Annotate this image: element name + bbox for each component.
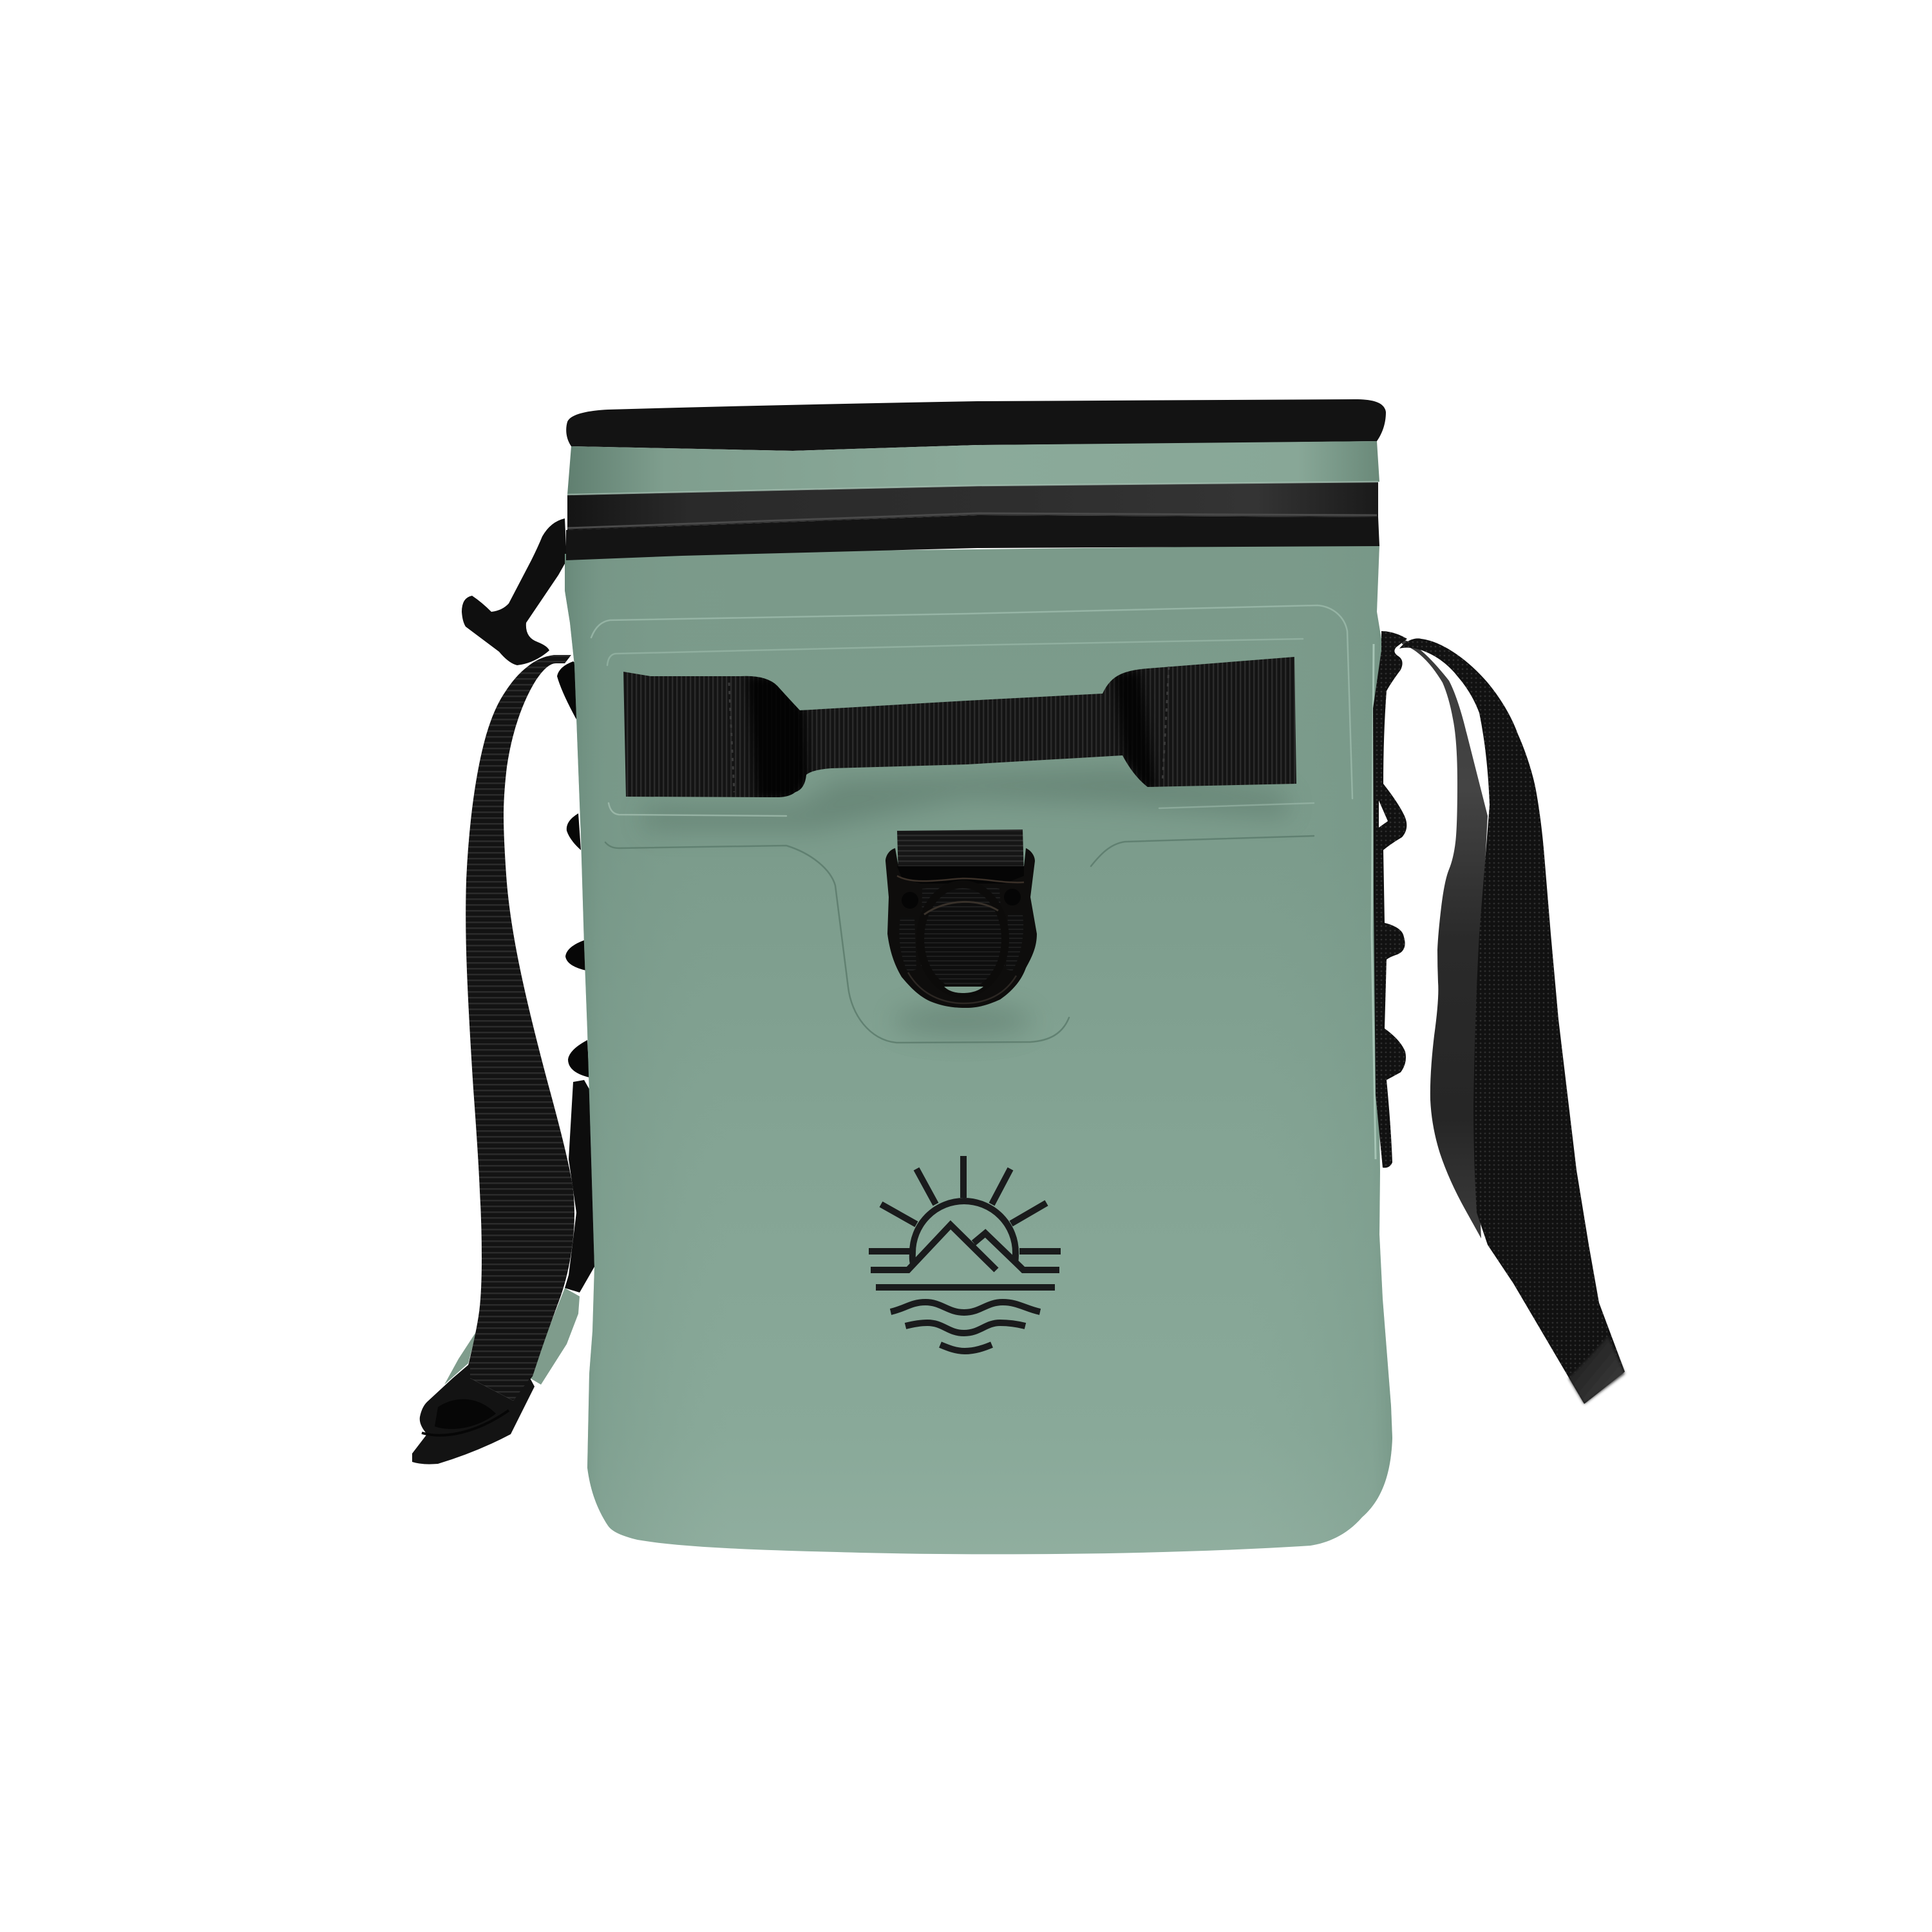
waves: [891, 1302, 1040, 1312]
left shoulder strap: [412, 655, 574, 1464]
sun rays: [881, 1156, 1046, 1224]
zipper lower lip: [566, 515, 1379, 560]
top black binding: [566, 399, 1386, 451]
mountains: [871, 1225, 1059, 1270]
side webbing: right: [1373, 631, 1407, 1168]
green lid stripe: [567, 441, 1379, 495]
zipper upper lip: [567, 482, 1378, 530]
left strap lower back piece: [565, 1080, 594, 1293]
handle fold shadows: [747, 670, 1156, 799]
strap front layer: [1399, 638, 1625, 1404]
strap back layer: [1402, 639, 1488, 1238]
welded seam panels: [591, 605, 1352, 1043]
sun arc: [913, 1201, 1016, 1264]
webbing through ring: [921, 886, 1005, 985]
right shoulder strap: [1399, 638, 1625, 1404]
side slots: [899, 918, 916, 972]
inner D highlight: [920, 884, 1005, 994]
sage opening: [944, 987, 983, 993]
left strap side loops: [557, 661, 589, 1077]
handle stitching: [729, 667, 1169, 792]
D-ring tie down: [886, 829, 1037, 1008]
zipper highlight: [567, 513, 1377, 528]
water line: [876, 1284, 1055, 1291]
bag body: [560, 541, 1397, 1558]
webbing tab: [897, 829, 1024, 876]
folded strap end: [412, 1363, 535, 1464]
ring plate: [886, 848, 1037, 1008]
ring holes: [902, 892, 918, 909]
handle webbing: [623, 657, 1296, 797]
product illustration: sage green cooler bag: [412, 399, 1627, 1555]
body edge shading: [560, 541, 1397, 1558]
logo: sun, mountains and waves: [869, 1156, 1061, 1351]
carry handle: [623, 657, 1296, 799]
waterproof zipper: [566, 482, 1379, 560]
left strap sage backing: [444, 1288, 580, 1385]
right side seam: [1372, 644, 1376, 1159]
gap under tab: [897, 866, 1024, 884]
horizon lines: [869, 1248, 1061, 1255]
clip hook: [462, 518, 567, 665]
frayed strap tip: [1569, 1336, 1625, 1404]
contact shadows: [644, 766, 1288, 1036]
body fill: [565, 545, 1392, 1554]
